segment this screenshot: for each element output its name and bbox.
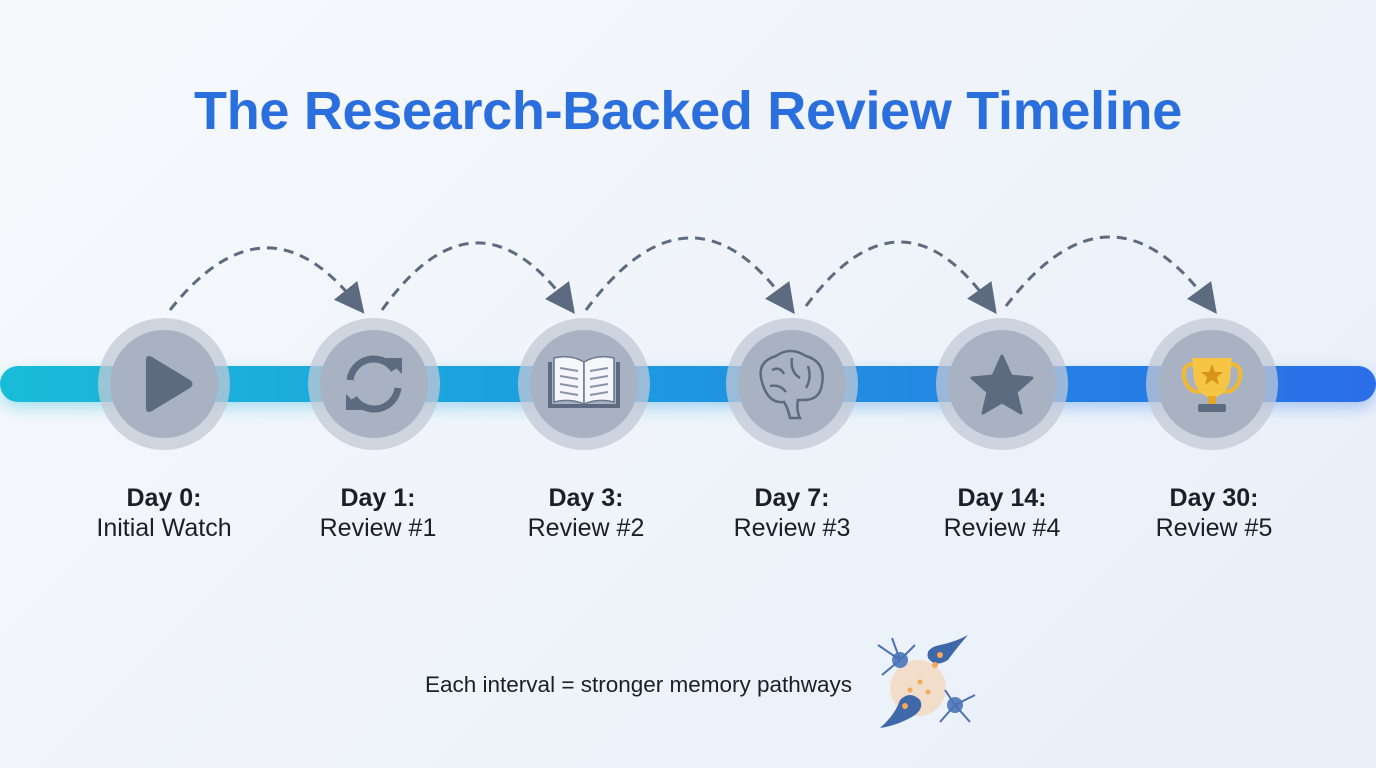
timeline bar (0, 366, 1376, 408)
label: day 7 (734, 484, 850, 542)
icon: book (550, 357, 618, 406)
label: day 3 (528, 484, 644, 542)
label: day 30 (1156, 484, 1272, 542)
icon: neurons (878, 635, 975, 728)
label: day 3: Day 3: (548, 484, 624, 512)
label: day 14: Day 14: (958, 484, 1046, 512)
label: day 0: Initial Watch (96, 514, 232, 542)
label: day 14 (944, 484, 1060, 542)
label: day 30: Review #5 (1156, 514, 1272, 542)
label: day 1 (320, 484, 436, 542)
icon: trophy (1184, 358, 1240, 412)
icon: refresh (346, 358, 402, 410)
label: day 3: Review #2 (528, 514, 644, 542)
node circles (98, 318, 1278, 450)
icon: play (146, 356, 192, 412)
icon: brain (761, 351, 823, 418)
label: day 0 (96, 484, 232, 542)
label: day 7: Day 7: (754, 484, 830, 512)
title: The Research-Backed Review Timeline (194, 81, 1182, 141)
label: day 14: Review #4 (944, 514, 1060, 542)
label: day 7: Review #3 (734, 514, 850, 542)
label: day 1: Day 1: (340, 484, 416, 512)
label: day 1: Review #1 (320, 514, 436, 542)
footer text: Each interval = stronger memory pathways (425, 672, 852, 697)
icon: star (972, 356, 1032, 413)
label: day 30: Day 30: (1170, 484, 1258, 512)
arrows: dashed arcs (170, 237, 1208, 310)
label: day 0: Day 0: (126, 484, 202, 512)
